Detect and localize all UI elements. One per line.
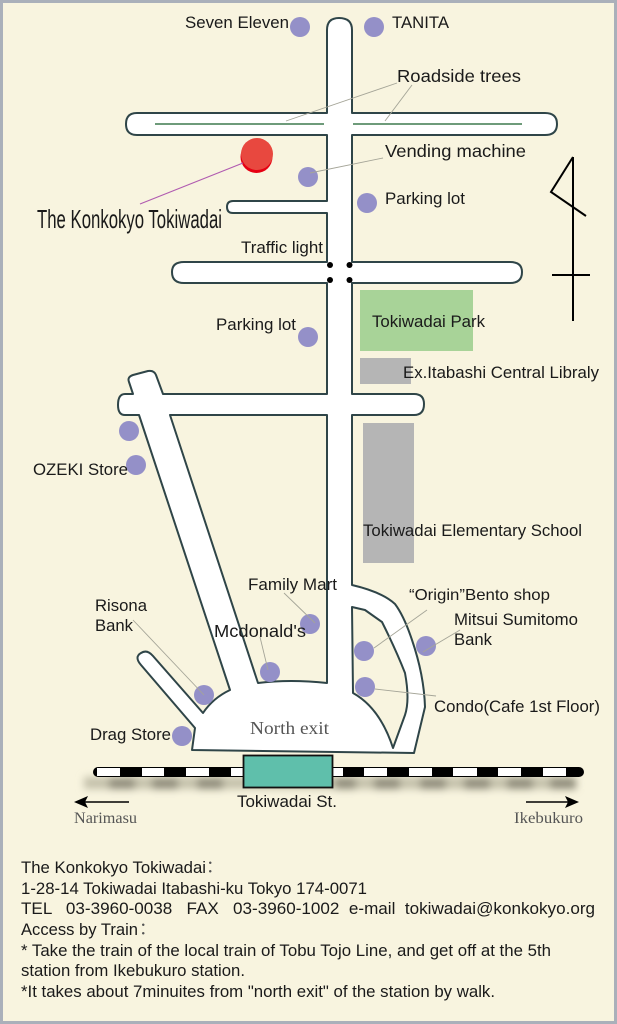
label: Mitsui Sumitomo Bank bbox=[454, 611, 578, 649]
church marker bbox=[240, 138, 273, 173]
label: school: Tokiwadai Elementary School bbox=[363, 522, 582, 540]
label: Mitsui Sumitomo Bank: Mitsui Sumitomo bbox=[454, 611, 578, 629]
north arrow bbox=[551, 157, 590, 321]
label: Narimasu: Narimasu bbox=[74, 810, 137, 827]
access information text block: ： bbox=[202, 859, 218, 877]
arrow: Ikebukuro bbox=[526, 796, 579, 808]
station box bbox=[244, 756, 332, 788]
label: Vending machine: Vending machine bbox=[385, 141, 526, 161]
label: station name: Tokiwadai St. bbox=[237, 793, 337, 811]
access information text block: Access by Train bbox=[21, 921, 138, 939]
label: OZEKI Store: OZEKI Store bbox=[33, 461, 128, 479]
label: Mitsui Sumitomo Bank: Bank bbox=[454, 631, 493, 649]
label: Risona Bank bbox=[95, 597, 148, 635]
access information text block: TEL 03-3960-0038 FAX 03-3960-1002 e-mail tokiwadai@konkokyo.org bbox=[21, 900, 595, 918]
label: Parking lot south: Parking lot bbox=[216, 316, 296, 334]
access information text block: * Take the train of the local train of Tobu Tojo Line, and get off at the 5th bbox=[21, 942, 551, 960]
label: library: Ex.Itabashi Central Libraly bbox=[403, 364, 600, 382]
label: Family Mart: Family Mart bbox=[248, 576, 337, 594]
roadside trees lines bbox=[155, 123, 522, 125]
label: Traffic light: Traffic light bbox=[241, 239, 323, 257]
label: Risona Bank: Bank bbox=[95, 617, 134, 635]
marker dots bbox=[119, 17, 436, 746]
label: Origin Bento shop: “Origin”Bento shop bbox=[409, 587, 550, 604]
label: Drag Store: Drag Store bbox=[90, 726, 171, 744]
rail shadow bbox=[84, 777, 576, 789]
arrow: Narimasu bbox=[74, 796, 129, 808]
traffic light dots bbox=[327, 262, 352, 283]
label: TANITA: TANITA bbox=[392, 14, 449, 32]
access information text block: 1-28-14 Tokiwadai Itabashi-ku Tokyo 174-0071 bbox=[21, 880, 367, 898]
railway line bbox=[93, 767, 584, 777]
label: Seven Eleven: Seven Eleven bbox=[185, 14, 289, 32]
label: Roadside trees: Roadside trees bbox=[397, 66, 521, 86]
label: church name: The Konkokyo Tokiwadai bbox=[37, 204, 222, 234]
label: Tokiwadai Park: Tokiwadai Park bbox=[372, 313, 486, 331]
label: Condo: Condo(Cafe 1st Floor) bbox=[434, 698, 600, 716]
access information text block: *It takes about 7minuites from "north exit" of the station by walk. bbox=[21, 983, 495, 1001]
label: North exit: North exit bbox=[250, 718, 329, 738]
church leader line bbox=[140, 163, 243, 204]
label: Parking lot north: Parking lot bbox=[385, 190, 465, 208]
label: Mcdonald's: Mcdonald's bbox=[214, 621, 306, 641]
access information text block: station from Ikebukuro station. bbox=[21, 962, 245, 980]
label: Risona Bank: Risona bbox=[95, 597, 148, 615]
road network bbox=[118, 18, 557, 753]
access information text block: The Konkokyo Tokiwadai bbox=[21, 859, 206, 877]
Tokiwadai Park block bbox=[360, 290, 473, 351]
elementary school block bbox=[363, 423, 414, 563]
access information text block: ： bbox=[135, 921, 152, 939]
leader lines bbox=[133, 83, 460, 696]
access information text block bbox=[21, 859, 595, 1001]
library block bbox=[360, 358, 411, 384]
label: Ikebukuro: Ikebukuro bbox=[514, 810, 583, 827]
